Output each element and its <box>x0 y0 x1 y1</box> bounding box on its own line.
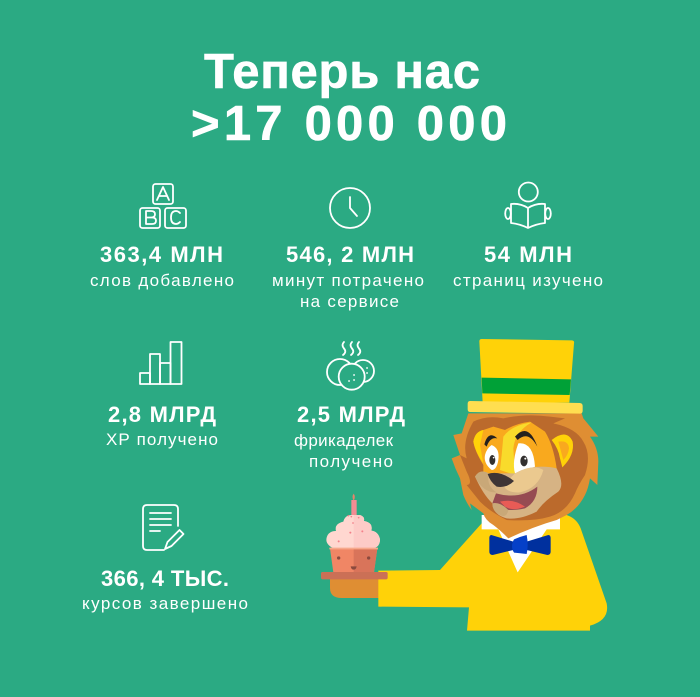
nose <box>488 473 514 487</box>
lion head <box>452 413 598 538</box>
icon: person reading <box>505 182 551 228</box>
stat: pages studied: страниц изучено <box>453 271 603 290</box>
stat: XP earned: ХР получено <box>106 430 218 449</box>
title: Теперь нас <box>204 45 480 99</box>
tray <box>321 572 388 579</box>
stat: meatballs: 2,5 МЛРД <box>297 402 405 427</box>
title <box>191 45 507 151</box>
icon: steaming meatballs <box>327 342 374 390</box>
icon: clock <box>330 188 370 228</box>
stat: minutes spent <box>272 188 424 311</box>
illustration: lion with cupcake <box>321 339 607 631</box>
title: >17 000 000 <box>191 97 507 151</box>
mane <box>452 413 598 538</box>
cupcake <box>326 494 380 572</box>
lion body and cupcake <box>321 494 607 631</box>
mouth <box>492 487 537 510</box>
stat: minutes spent: 546, 2 МЛН <box>286 242 414 267</box>
stat: XP earned <box>106 342 218 449</box>
muzzle <box>475 467 561 519</box>
stat: meatballs: фрикаделек <box>294 431 394 450</box>
eyebrows <box>484 435 497 447</box>
paw <box>330 577 380 598</box>
stat: meatballs: получено <box>309 452 393 471</box>
stat: words added <box>90 184 234 290</box>
icon: alphabet blocks <box>140 184 186 228</box>
hat band <box>482 378 571 395</box>
bow tie <box>489 535 551 555</box>
stat: minutes spent: минут потрачено <box>272 271 424 290</box>
stat: minutes spent: на сервисе <box>300 292 399 311</box>
stat: courses completed: курсов завершено <box>82 594 248 613</box>
ear <box>552 435 573 467</box>
hat brim <box>468 401 583 414</box>
stat: pages studied <box>453 182 603 290</box>
stat: words added: 363,4 МЛН <box>100 242 223 267</box>
stat: pages studied: 54 МЛН <box>484 242 572 267</box>
yellow jacket <box>378 515 607 631</box>
icon: note with pencil <box>143 505 184 550</box>
stat: words added: слов добавлено <box>90 271 234 290</box>
lion hat <box>468 339 583 414</box>
shirt collar <box>482 515 560 572</box>
stat: courses completed <box>82 505 248 613</box>
face <box>473 422 557 482</box>
stat: courses completed: 366, 4 ТЫС. <box>101 566 229 591</box>
eyes <box>485 445 499 470</box>
stat: XP earned: 2,8 МЛРД <box>108 402 216 427</box>
icon: bar chart <box>140 342 182 384</box>
hat crown <box>479 339 574 403</box>
stat: meatballs <box>294 342 405 471</box>
